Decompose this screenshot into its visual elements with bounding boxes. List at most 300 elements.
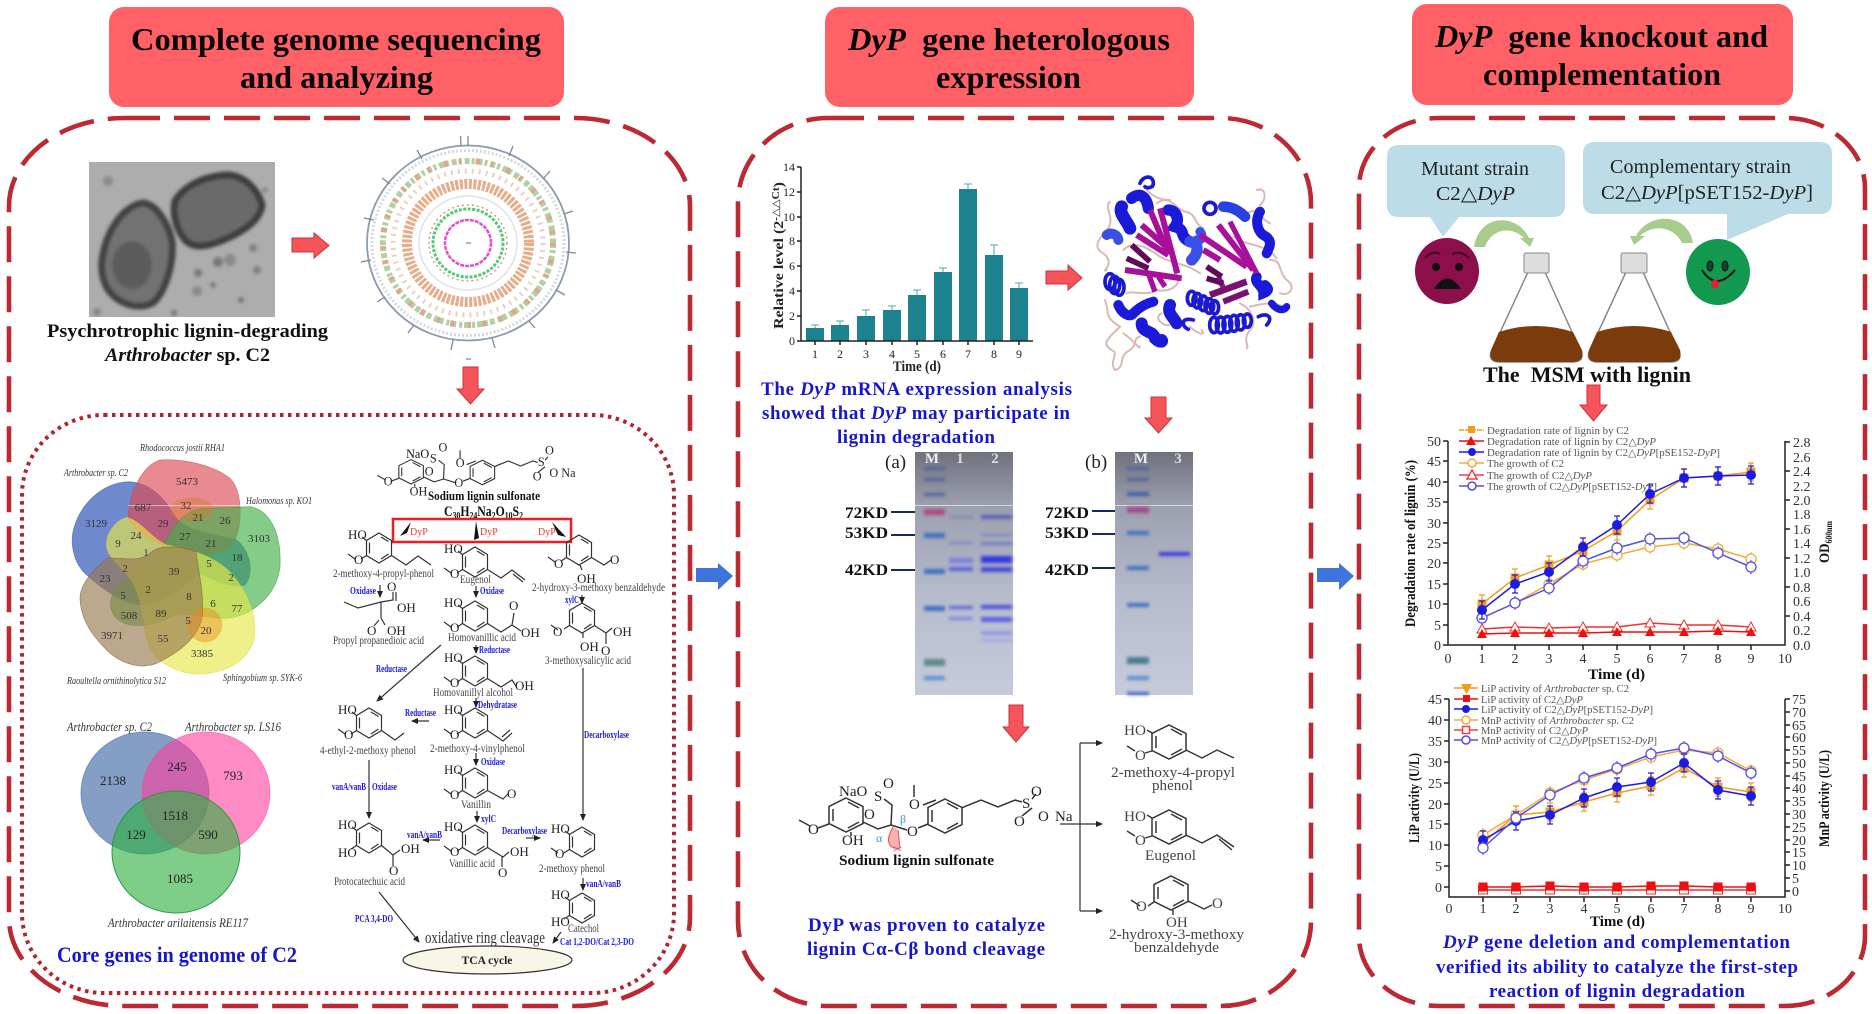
legend: Degradation rate of lignin by C2	[1487, 426, 1629, 437]
compound names: 2-hydroxy-3-methoxy benzaldehyde	[532, 582, 665, 594]
chart: five-way venn diagram	[63, 442, 312, 687]
compounds: ring structures: O	[498, 865, 507, 880]
arrow: to genome map	[292, 233, 329, 258]
compound names: 2-methoxy-4-propyl-phenol	[333, 568, 434, 580]
enzyme names: PCA 3,4-DO	[355, 914, 393, 925]
chart: lignin degradation and growth: 15	[1427, 578, 1441, 593]
chart: three-way venn diagram: 1085	[167, 871, 193, 886]
chart: LiP and MnP activity: 2	[1512, 902, 1520, 917]
compounds: ring structures: HO	[551, 821, 570, 836]
compounds: ring structures: HO	[338, 845, 357, 860]
chart: three-way venn diagram: Arthrobacter sp. LS16	[184, 719, 281, 734]
caption: mRNA expression analysis: showed that DyP may participate in	[762, 403, 1070, 424]
image: DyP protein structure	[1097, 177, 1292, 370]
heading: DyP gene heterologous expression: DyP gene heterologous	[847, 21, 1170, 57]
chart: LiP and MnP activity: 20	[1428, 798, 1442, 813]
legend: LiP activity of Arthrobacter sp. C2	[1481, 684, 1629, 695]
heading: complete genome sequencing	[109, 7, 564, 107]
chart: LiP and MnP activity: 30	[1428, 756, 1442, 771]
legend: Degradation rate of lignin by C2△ DyP	[1487, 437, 1657, 448]
chart: lignin degradation and growth: Degradation rate of lignin (%)	[1403, 460, 1419, 627]
panel: comparative genomics and pathway	[22, 415, 674, 993]
chart: LiP and MnP activity: 25	[1792, 821, 1806, 836]
chart: lignin degradation and growth: 0.8	[1793, 581, 1810, 596]
legend: LiP activity of C2△DyP[pSET152-DyP]	[1481, 705, 1653, 716]
gel b: 3	[1174, 451, 1182, 467]
chart: LiP and MnP activity: 8	[1714, 902, 1722, 917]
chart: LiP and MnP activity: 75	[1792, 693, 1806, 708]
chart: five-way venn diagram: 2	[145, 584, 151, 596]
chart: five-way venn diagram: 1	[143, 547, 149, 559]
callout: complementary strain: C2△DyP[pSET152-DyP]	[1601, 182, 1813, 204]
panel: DyP expression	[738, 7, 1311, 1006]
molecule: sodium lignin sulfonate: Na	[1055, 809, 1073, 825]
chart: five-way venn diagram: 3385	[191, 648, 214, 660]
caption: gene deletion and complementation: verified its ability to catalyze the first-step	[1436, 957, 1798, 978]
pathway arrows	[369, 585, 583, 943]
icon: flask left	[1490, 253, 1583, 362]
molecule: sodium lignin sulfonate (small): O	[456, 456, 465, 470]
product: 2-hydroxy-3-methoxy benzaldehyde: O	[1136, 899, 1147, 915]
molecule: sodium lignin sulfonate: O	[907, 824, 918, 840]
compounds: ring structures: HO	[551, 887, 570, 902]
panel border: knockout	[1359, 118, 1865, 1006]
diagram: lignin degradation pathway: 2	[492, 511, 496, 522]
compound names	[320, 568, 665, 935]
compounds: ring structures: HO	[551, 914, 570, 929]
chart: relative expression bars: 1	[812, 347, 818, 361]
chart: five-way venn diagram: Rhodococcus jostii RHA1	[139, 442, 225, 454]
chart: LiP and MnP activity: 5	[1614, 902, 1620, 917]
gel a	[845, 451, 1013, 695]
molecule: sodium lignin sulfonate: O	[883, 776, 894, 792]
compounds: ring structures: O	[555, 846, 564, 861]
compounds: ring structures: O	[450, 620, 459, 635]
chart: three-way venn diagram: Arthrobacter arilaitensis RE117	[107, 915, 248, 930]
chart: lignin degradation and growth: 5	[1614, 652, 1620, 667]
caption: gene deletion and complementation: DyP gene deletion and complementation	[1442, 932, 1790, 953]
chart: lignin degradation and growth: 0.4	[1793, 610, 1810, 625]
chart: five-way venn diagram: 39	[168, 566, 180, 578]
enzyme names: Oxidase	[480, 586, 504, 597]
chart: three-way venn diagram	[66, 719, 281, 930]
chart: lignin degradation and growth: 600nm	[1824, 521, 1834, 544]
enzyme names: Oxidase	[372, 782, 397, 793]
chart: LiP and MnP activity	[1407, 684, 1833, 930]
compounds: ring structures: O	[450, 566, 459, 581]
callout: mutant strain: Mutant strain	[1421, 158, 1529, 180]
chart: five-way venn diagram: 18	[232, 552, 243, 564]
callout: mutant strain	[1387, 145, 1565, 237]
legend: Degradation rate of lignin by C2△ DyP[pSE152-DyP]	[1487, 448, 1720, 459]
compounds: ring structures: HO	[348, 527, 367, 542]
molecule: sodium lignin sulfonate (small): O	[454, 476, 463, 490]
diagram: lignin degradation pathway: 30	[452, 511, 460, 522]
compounds: ring structures: OH	[515, 678, 534, 693]
diagram: cleavage products	[1060, 723, 1244, 956]
panel: DyP knockout and complementation	[1359, 4, 1865, 1006]
chart: LiP and MnP activity: 65	[1792, 719, 1806, 734]
molecule: sodium lignin sulfonate (small): S	[430, 451, 437, 465]
chart: relative expression bars: 10	[783, 210, 795, 224]
chart: five-way venn diagram: 24	[130, 530, 142, 542]
chart: relative expression bars: 2	[837, 347, 843, 361]
gel b: 72KD	[1045, 505, 1089, 522]
chart: five-way venn diagram: 5473	[176, 476, 198, 488]
chart: lignin degradation and growth: 2	[1512, 652, 1518, 667]
molecule: sodium lignin sulfonate: Sodium lignin sulfonate	[839, 853, 994, 869]
chart: lignin degradation and growth: OD	[1817, 541, 1833, 563]
chart: lignin degradation and growth: 30	[1427, 517, 1441, 532]
molecule: sodium lignin sulfonate (small): O	[425, 464, 434, 478]
arrow: to protein structure	[1046, 265, 1082, 290]
chart: three-way venn diagram: 590	[198, 827, 218, 842]
caption: mRNA expression analysis	[761, 379, 1072, 448]
chart: LiP and MnP activity: 40	[1428, 714, 1442, 729]
chart: three-way venn diagram: 245	[167, 759, 187, 774]
enzyme names: Reductase	[376, 664, 407, 675]
chart: relative expression bars: 14	[783, 160, 795, 174]
chart: lignin degradation and growth: 2.6	[1793, 451, 1810, 466]
chart: lignin degradation and growth: 2.2	[1793, 480, 1810, 495]
image: bacteria micrograph	[89, 162, 275, 317]
compounds: ring structures: HO	[444, 595, 463, 610]
compounds: ring structures: OH	[510, 844, 529, 859]
compounds: ring structures: HO	[444, 541, 463, 556]
chart: LiP and MnP activity: 10	[1428, 839, 1442, 854]
product: 2-methoxy-4-propyl phenol: phenol	[1152, 778, 1193, 794]
panel border: expression	[738, 118, 1311, 1006]
compounds: ring structures	[338, 527, 632, 929]
molecule: sodium lignin sulfonate (small)	[377, 441, 576, 499]
chart: lignin degradation and growth: 1.2	[1793, 552, 1810, 567]
icon: flask right	[1588, 253, 1681, 362]
chart: lignin degradation and growth: 9	[1748, 652, 1754, 667]
icon: happy face	[1686, 239, 1750, 305]
chart: relative expression bars: Time (d)	[893, 359, 941, 375]
chart: relative expression bars	[771, 160, 1033, 375]
chart: LiP and MnP activity: 45	[1792, 770, 1806, 785]
chart: LiP and MnP activity: 55	[1792, 744, 1806, 759]
enzyme names: vanA/vanB	[586, 879, 621, 890]
icon: sad face	[1415, 238, 1479, 304]
compound names: Vanillin	[461, 799, 491, 811]
chart: LiP and MnP activity: 10	[1778, 902, 1792, 917]
chart: five-way venn diagram: 5	[185, 615, 191, 627]
chart: five-way venn diagram: 3129	[85, 518, 108, 530]
chart: LiP and MnP activity: Time (d)	[1590, 914, 1645, 930]
product: 2-hydroxy-3-methoxy benzaldehyde: O	[1212, 896, 1223, 912]
chart: relative expression bars: Relative level (2	[772, 234, 787, 329]
molecule: sodium lignin sulfonate: NaO	[839, 784, 867, 800]
caption: mRNA expression analysis: lignin degradation	[837, 427, 995, 448]
diagram: lignin degradation pathway: Na	[477, 504, 492, 520]
arrow: to growth chart	[1580, 385, 1607, 421]
compounds: ring structures: HO	[444, 702, 463, 717]
chart: lignin degradation and growth: 1.6	[1793, 523, 1810, 538]
chart: relative expression bars: 6	[940, 347, 946, 361]
heading: complete genome sequencing: Complete genome sequencing	[131, 21, 541, 57]
chart: lignin degradation and growth: 0	[1434, 639, 1441, 654]
product: eugenol: HO	[1124, 809, 1146, 825]
chart: five-way venn diagram: 23	[100, 573, 111, 585]
caption: gene deletion and complementation	[1436, 932, 1798, 1002]
chart: five-way venn diagram: 2	[228, 572, 234, 584]
chart: lignin degradation and growth	[1403, 426, 1834, 683]
chart: LiP and MnP activity: 5	[1792, 872, 1799, 887]
chart: five-way venn diagram: Halomonas sp. KO1	[245, 495, 312, 507]
chart: LiP and MnP activity: 4	[1580, 902, 1588, 917]
chart: five-way venn diagram: Raoultella ornithinolytica S12	[66, 675, 166, 687]
arrow: to comparative analyses	[457, 367, 484, 404]
diagram: lignin degradation pathway: S	[513, 504, 519, 520]
chart: five-way venn diagram: 5	[120, 590, 126, 602]
diagram: lignin degradation pathway	[320, 441, 665, 974]
chart: lignin degradation and growth: 1.8	[1793, 508, 1810, 523]
chart: lignin degradation and growth: 20	[1427, 557, 1441, 572]
compounds: ring structures: O	[553, 624, 562, 639]
gel a: 72KD	[845, 505, 888, 522]
highlight: DyP cleavage box: DyP	[410, 527, 428, 538]
compound names: 4-ethyl-2-methoxy phenol	[320, 745, 416, 757]
chart: lignin degradation and growth: 0	[1444, 652, 1452, 667]
compound names: Homovanillic acid	[448, 632, 516, 644]
chart: five-way venn diagram: 2	[122, 563, 128, 575]
chart: five-way venn diagram: Arthrobacter sp. C2	[63, 467, 128, 479]
molecule: sodium lignin sulfonate (small): NaO	[406, 447, 429, 461]
gel b	[1045, 451, 1193, 695]
callout: complementary strain: Complementary strain	[1610, 156, 1791, 178]
chart: five-way venn diagram: 21	[192, 512, 204, 524]
chart: LiP and MnP activity: 6	[1648, 902, 1654, 917]
product: eugenol	[1124, 809, 1234, 864]
arrow: mutant to flask	[1474, 220, 1534, 247]
legend: MnP activity of C2△DyP[pSET152-DyP]	[1481, 736, 1657, 747]
chart: five-way venn diagram: Sphingobium sp. SYK-6	[223, 672, 302, 684]
gel b: (b)	[1085, 452, 1107, 473]
compound names: Propyl propanedioic acid	[333, 635, 424, 647]
molecule: sodium lignin sulfonate: ✂	[893, 844, 902, 856]
compounds: ring structures: OH	[613, 624, 632, 639]
diagram: lignin degradation pathway: 10	[505, 511, 513, 522]
compounds: ring structures: OH	[387, 623, 406, 638]
molecule: sodium lignin sulfonate (small): OH	[410, 485, 428, 499]
highlight: DyP cleavage box: DyP	[538, 527, 556, 538]
chart: relative expression bars: 8	[789, 234, 795, 248]
chart: three-way venn diagram: Arthrobacter sp. C2	[66, 719, 152, 734]
product: eugenol: O	[1135, 833, 1146, 849]
chart: lignin degradation and growth: 2.4	[1793, 465, 1810, 480]
highlight: DyP cleavage box: DyP	[480, 527, 498, 538]
molecule: sodium lignin sulfonate (small): O	[533, 469, 542, 483]
compounds: ring structures: O	[509, 598, 518, 613]
chart: lignin degradation and growth: 3	[1546, 652, 1552, 667]
molecule: sodium lignin sulfonate	[799, 776, 1073, 869]
molecule: sodium lignin sulfonate: O	[1038, 809, 1049, 825]
chart: lignin degradation and growth: 10	[1778, 652, 1792, 667]
panel: genome sequencing	[9, 7, 690, 1006]
gel a: 42KD	[845, 562, 888, 579]
chart: lignin degradation and growth: 40	[1427, 476, 1441, 491]
chart: five-way venn diagram: 26	[220, 515, 231, 527]
chart: five-way venn diagram: 77	[232, 603, 243, 615]
molecule: sodium lignin sulfonate: S	[874, 789, 882, 805]
compounds: ring structures: O	[554, 556, 563, 571]
enzyme names: vanA/vanB	[407, 830, 442, 841]
compounds: ring structures: O	[601, 643, 610, 658]
compound names: Vanillic acid	[449, 858, 495, 870]
diagram: lignin degradation pathway: C	[444, 504, 455, 520]
compounds: ring structures: OH	[521, 625, 540, 640]
compounds: ring structures: OH	[401, 841, 420, 856]
TCA cycle ellipse	[403, 946, 572, 974]
chart: LiP and MnP activity: MnP activity (U/L)	[1817, 750, 1833, 847]
compounds: ring structures: HO	[444, 819, 463, 834]
chart: lignin degradation and growth: 0.6	[1793, 595, 1810, 610]
chart: relative expression bars: 3	[863, 347, 869, 361]
enzyme names: vanA/vanB	[332, 782, 366, 793]
series	[1483, 748, 1751, 890]
chart: LiP and MnP activity: 1	[1480, 902, 1486, 917]
series	[1482, 472, 1751, 634]
legend: MnP activity of Arthrobacter sp. C2	[1481, 716, 1634, 727]
chart: five-way venn diagram: 32	[180, 500, 192, 512]
chart: five-way venn diagram: 89	[156, 608, 167, 620]
chart: five-way venn diagram: 8	[186, 591, 192, 603]
chart: LiP and MnP activity: 0	[1435, 881, 1442, 896]
legend: The growth of C2	[1487, 459, 1564, 470]
label: MSM with lignin: The MSM with lignin	[1483, 362, 1691, 387]
molecule: sodium lignin sulfonate (small): S	[538, 455, 545, 469]
callout: mutant strain: C2△DyP	[1436, 183, 1515, 205]
compounds: ring structures: O	[450, 675, 459, 690]
chart: LiP and MnP activity: LiP activity (U/L)	[1407, 753, 1423, 843]
chart: five-way venn diagram: 29	[158, 518, 169, 530]
chart: LiP and MnP activity: 40	[1792, 782, 1806, 797]
chart: LiP and MnP activity: 15	[1792, 846, 1806, 861]
product: eugenol: Eugenol	[1145, 848, 1196, 864]
enzyme names: xylC	[565, 595, 579, 606]
chart: three-way venn diagram: 2138	[100, 773, 126, 788]
chart: LiP and MnP activity: 10	[1792, 859, 1806, 874]
chart: three-way venn diagram: 1518	[162, 808, 188, 823]
chart: LiP and MnP activity: 5	[1435, 860, 1442, 875]
compounds: ring structures: O	[387, 579, 396, 594]
chart: LiP and MnP activity: 3	[1546, 902, 1554, 917]
gel a: 2	[991, 451, 999, 467]
compounds: ring structures: HO	[444, 650, 463, 665]
compounds: ring structures: O	[610, 552, 619, 567]
legend	[1459, 426, 1720, 493]
molecule: sodium lignin sulfonate: β	[900, 812, 906, 826]
molecule: sodium lignin sulfonate (small): O	[384, 474, 393, 488]
compounds: ring structures: O	[450, 787, 459, 802]
heading: DyP gene heterologous expression: expression	[936, 59, 1081, 95]
chart: relative expression bars: 6	[789, 259, 795, 273]
chart: relative expression bars: 2	[789, 309, 795, 323]
molecule: sodium lignin sulfonate: O	[909, 797, 920, 813]
chart: LiP and MnP activity: 70	[1792, 706, 1806, 721]
compounds: ring structures: HO	[338, 702, 357, 717]
gel b: 53KD	[1045, 525, 1089, 542]
legend: The growth of C2△DyP[pSET152-DyP]	[1487, 482, 1657, 493]
heading: DyP gene knockout and complementation: complementation	[1483, 56, 1721, 92]
chart: LiP and MnP activity: 20	[1792, 834, 1806, 849]
chart: five-way venn diagram: 687	[135, 502, 152, 514]
label: oxidative ring cleavage: oxidative ring cleavage	[425, 928, 545, 947]
enzyme names: Reductase	[479, 645, 510, 656]
chart: three-way venn diagram: 129	[126, 827, 146, 842]
panel border: genome	[9, 118, 690, 1006]
chart: LiP and MnP activity: 50	[1792, 757, 1806, 772]
chart: circular genome map	[361, 136, 576, 359]
chart: lignin degradation and growth: 5	[1434, 619, 1441, 634]
arrow: genome to expression	[696, 563, 733, 590]
chart: relative expression bars: 4	[889, 347, 895, 361]
chart: lignin degradation and growth: 1	[1478, 652, 1486, 667]
callout: complementary strain	[1583, 142, 1832, 240]
caption: C-alpha C-beta cleavage: DyP was proven to catalyze	[808, 915, 1045, 936]
diagram: lignin degradation pathway: H	[460, 504, 470, 520]
enzyme names: xylC	[481, 814, 496, 825]
chart: relative expression bars: 0	[789, 334, 795, 348]
chart: five-way venn diagram: 27	[180, 531, 191, 543]
compounds: ring structures: O	[450, 727, 459, 742]
legend: MnP activity of C2△DyP	[1481, 726, 1589, 737]
axes	[1444, 699, 1790, 902]
compounds: ring structures: OH	[580, 639, 599, 654]
product: 2-methoxy-4-propyl phenol	[1111, 723, 1235, 794]
product: 2-methoxy-4-propyl phenol: 2-methoxy-4-propyl	[1111, 765, 1235, 781]
enzyme names: Decarboxylase	[584, 730, 629, 741]
compound names: 2-methoxy phenol	[539, 863, 605, 875]
arrow: complemented to flask	[1630, 219, 1693, 245]
product: 2-hydroxy-3-methoxy benzaldehyde: benzaldehyde	[1134, 940, 1219, 956]
chart: LiP and MnP activity: 7	[1680, 902, 1688, 917]
gel a: (a)	[885, 452, 906, 473]
chart: five-way venn diagram: 3103	[248, 533, 270, 545]
caption: Arthrobacter sp. C2	[47, 321, 329, 366]
heading: DyP gene knockout and complementation	[1412, 4, 1793, 105]
highlight: DyP cleavage box	[393, 519, 571, 542]
chart: lignin degradation and growth: 50	[1427, 435, 1441, 450]
chart: relative expression bars: )	[772, 182, 787, 187]
product: 2-methoxy-4-propyl phenol: O	[1135, 748, 1146, 764]
chart: LiP and MnP activity: 0	[1792, 885, 1799, 900]
diagram: lignin degradation pathway: Sodium lignin sulfonate	[428, 488, 540, 503]
gel a: M	[925, 451, 939, 467]
heading: DyP gene heterologous expression	[825, 7, 1194, 107]
heading: DyP gene knockout and complementation: DyP gene knockout and	[1434, 18, 1768, 54]
chart: lignin degradation and growth: 10	[1427, 598, 1441, 613]
chart: relative expression bars: 12	[783, 185, 795, 199]
enzyme names: Oxidase	[481, 757, 505, 768]
chart: lignin degradation and growth: 7	[1680, 652, 1688, 667]
enzyme names: Reductase	[405, 708, 436, 719]
compounds: ring structures: O	[367, 623, 376, 638]
arrow: to substrate	[1003, 705, 1029, 742]
dotted border	[22, 415, 674, 993]
chart: relative expression bars: -△△Ct	[771, 187, 782, 221]
enzyme names: Cat 1,2-DO/Cat 2,3-DO	[560, 937, 634, 948]
molecule: sodium lignin sulfonate: O	[1014, 814, 1025, 830]
enzyme names: Dehydratase	[478, 700, 517, 711]
compound names: 3-methoxysalicylic acid	[545, 655, 631, 667]
chart: LiP and MnP activity: 45	[1428, 693, 1442, 708]
product: 2-hydroxy-3-methoxy benzaldehyde	[1109, 876, 1244, 956]
molecule: sodium lignin sulfonate: α	[876, 831, 883, 845]
compounds: ring structures: O	[450, 844, 459, 859]
